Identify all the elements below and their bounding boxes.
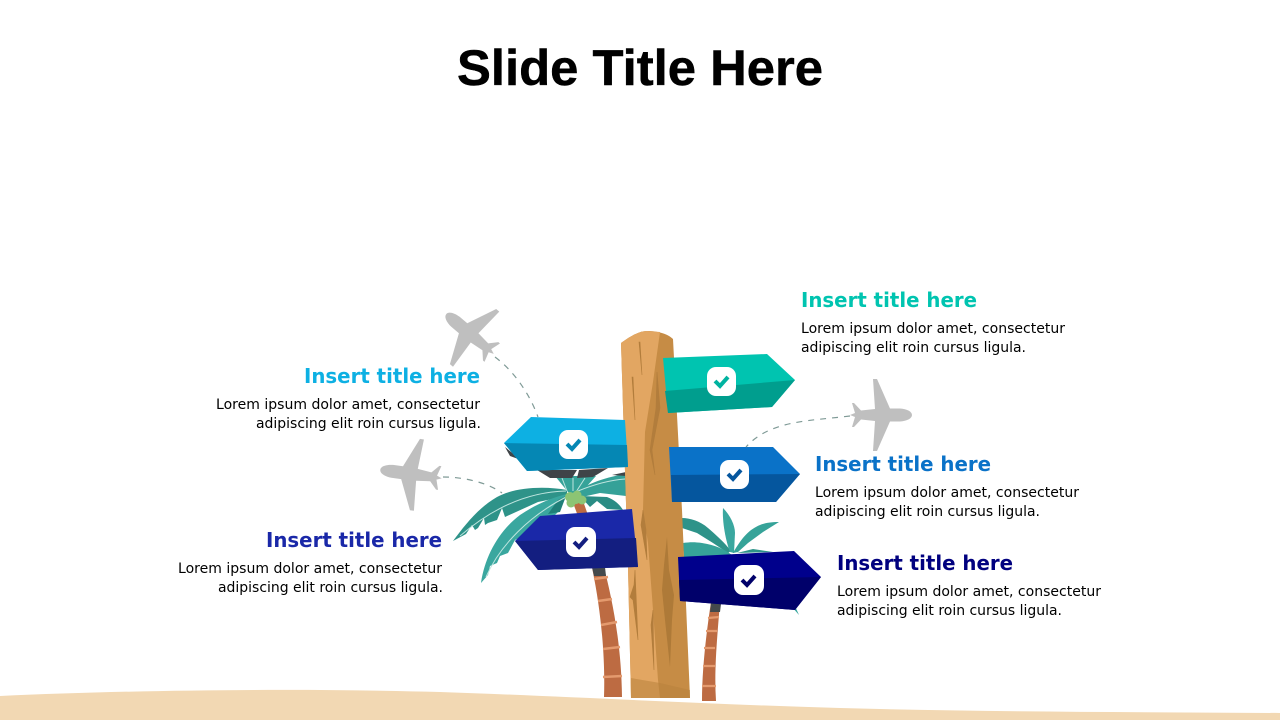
heading: Insert title here xyxy=(815,452,991,476)
frond: right xyxy=(733,522,779,553)
sign: teal xyxy=(663,354,795,413)
sign lower band xyxy=(504,443,628,471)
wood knot xyxy=(662,537,674,667)
frond: lower left xyxy=(481,494,567,583)
text block: teal xyxy=(801,288,1065,356)
sign face xyxy=(515,509,638,570)
plane: lower left xyxy=(375,434,447,514)
post base xyxy=(621,331,690,698)
flight path: lower left xyxy=(443,477,502,493)
sign shadow on palm xyxy=(505,447,626,478)
frond: top xyxy=(723,508,735,553)
frond: dark inner xyxy=(548,496,566,514)
frond: far right xyxy=(737,549,773,553)
left palm tree xyxy=(453,447,626,697)
coconuts xyxy=(565,490,586,508)
body line 2: adipiscing elit roin cursus ligula. xyxy=(256,416,481,432)
frond: left lower xyxy=(683,542,732,558)
icon: check xyxy=(734,565,764,595)
flight path: top left xyxy=(495,357,538,417)
wood cracks xyxy=(630,342,660,670)
sign lower band xyxy=(665,380,795,413)
text block: blue xyxy=(815,452,1079,520)
sign lower band xyxy=(679,577,821,610)
body line 1: Lorem ipsum dolor amet, consectetur xyxy=(801,321,1065,337)
plane: top left xyxy=(423,286,517,382)
heading: Insert title here xyxy=(304,364,480,388)
frond: lower right xyxy=(580,496,623,510)
text block: indigo xyxy=(178,528,443,596)
frond: left upper xyxy=(682,518,731,553)
icon: check xyxy=(566,527,596,557)
text block: navy xyxy=(837,551,1101,619)
icon: check xyxy=(559,430,588,459)
body line 1: Lorem ipsum dolor amet, consectetur xyxy=(216,397,480,413)
sign face xyxy=(504,417,628,471)
sign lower band xyxy=(671,474,800,502)
text block: light blue xyxy=(216,364,481,432)
heading: Insert title here xyxy=(837,551,1013,575)
sign face xyxy=(669,447,800,502)
sign lower band xyxy=(515,538,638,570)
sign: light blue xyxy=(504,417,628,471)
heading: Insert title here xyxy=(801,288,977,312)
heading: Insert title here xyxy=(266,528,442,552)
body line 1: Lorem ipsum dolor amet, consectetur xyxy=(178,561,442,577)
sign: indigo xyxy=(515,509,638,570)
frond: top fan xyxy=(555,476,596,496)
flight path: right xyxy=(746,416,850,447)
sign: blue xyxy=(669,447,800,502)
frond: upper left xyxy=(453,488,567,541)
frond veins xyxy=(460,478,625,577)
post light side xyxy=(621,331,660,698)
wooden post xyxy=(621,331,690,698)
body line 2: adipiscing elit roin cursus ligula. xyxy=(801,340,1026,356)
trunk shadow xyxy=(710,603,721,612)
body line 2: adipiscing elit roin cursus ligula. xyxy=(837,603,1062,619)
sign face xyxy=(678,551,821,610)
icon: check xyxy=(707,367,736,396)
title: Slide Title Here xyxy=(457,40,823,96)
right palm tree xyxy=(682,508,799,701)
body line 1: Lorem ipsum dolor amet, consectetur xyxy=(837,584,1101,600)
sign face xyxy=(663,354,795,413)
sand xyxy=(0,690,1280,720)
frond tip xyxy=(792,606,799,615)
body line 2: adipiscing elit roin cursus ligula. xyxy=(218,580,443,596)
frond: right xyxy=(575,474,626,497)
trunk rings xyxy=(594,577,622,677)
body line 2: adipiscing elit roin cursus ligula. xyxy=(815,504,1040,520)
icon: check xyxy=(720,460,749,489)
body line 1: Lorem ipsum dolor amet, consectetur xyxy=(815,485,1079,501)
trunk xyxy=(702,602,720,701)
trunk shadow xyxy=(592,567,606,576)
post base shade xyxy=(631,678,690,698)
plane: right xyxy=(850,379,912,451)
trunk xyxy=(573,501,622,697)
trunk rings xyxy=(702,617,719,686)
sign: navy xyxy=(678,551,821,610)
